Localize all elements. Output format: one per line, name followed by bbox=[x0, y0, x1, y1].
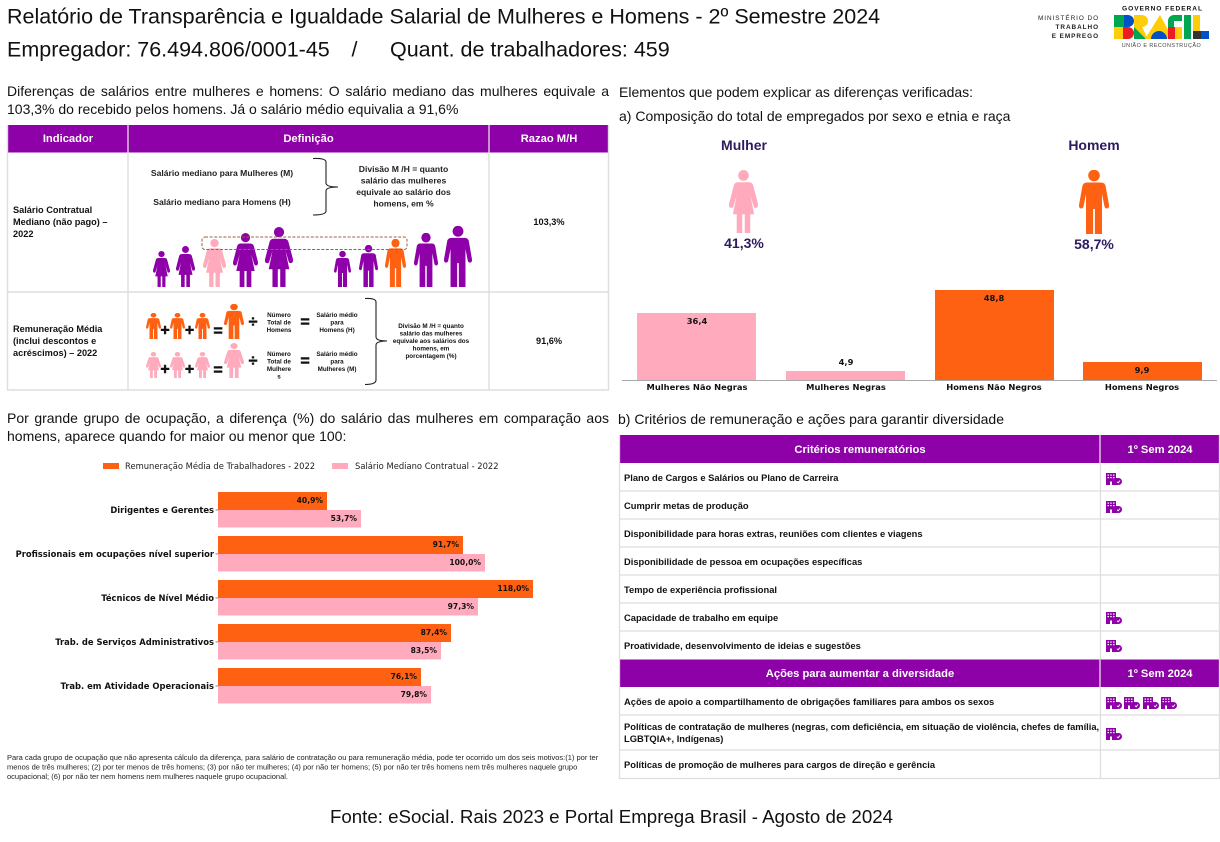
panel: homem: Homem bbox=[1068, 137, 1120, 153]
panel: mulher: 41,3% bbox=[724, 235, 764, 251]
text block: occupation difference: Por grande grupo de ocupação, a diferença (%) do salário das mulheres em comparação aos bbox=[7, 410, 609, 426]
bar chart: ocupação: Trab. de Serviços Administrativos bbox=[55, 637, 214, 647]
title: Relatório de Transparência e Igualdade Salarial de Mulheres e Homens - 2º Semestre 2024 bbox=[7, 4, 880, 28]
formula: homens: = bbox=[300, 314, 310, 331]
formula: homens: + bbox=[185, 322, 194, 339]
bar chart: ocupação: 100,0% bbox=[449, 558, 481, 567]
formula: mulheres: Mulhere bbox=[267, 366, 292, 373]
heading: elementos: Elementos que podem explicar as diferenças verificadas: bbox=[619, 84, 973, 100]
formula: mulheres: ÷ bbox=[249, 353, 258, 370]
bar chart: composição: Mulheres Não Negras bbox=[647, 382, 747, 392]
row: salário mediano: Salário mediano para Homens (H) bbox=[153, 197, 291, 207]
logo: governo federal brasil: GOVERNO FEDERAL bbox=[1122, 6, 1203, 12]
criteria rows: Capacidade de trabalho em equipe bbox=[624, 613, 778, 623]
criteria rows: Cumprir metas de produção bbox=[624, 501, 749, 511]
bar chart: ocupação: Dirigentes e Gerentes bbox=[110, 505, 214, 515]
criteria rows: Políticas de promoção de mulheres para cargos de direção e gerência bbox=[624, 760, 936, 770]
row: remuneração média: porcentagem (%) bbox=[405, 353, 457, 360]
row: remuneração média: homens, em bbox=[413, 346, 450, 352]
bar chart: composição: Mulheres Negras bbox=[806, 382, 886, 392]
legend: Remuneração Média de Trabalhadores - 2022 bbox=[125, 461, 315, 471]
title: Quant. de trabalhadores: 459 bbox=[390, 38, 670, 62]
row: remuneração média bbox=[13, 298, 562, 384]
formula: mulheres: Mulheres (M) bbox=[318, 366, 356, 373]
row: salário mediano: 2022 bbox=[13, 229, 33, 239]
row: salário mediano: equivale ao salário dos bbox=[356, 187, 451, 197]
title: Empregador: 76.494.806/0001-45 bbox=[7, 38, 330, 62]
heading: critérios: b) Critérios de remuneração e ações para garantir diversidade bbox=[618, 411, 1004, 427]
heading: composição: a) Composição do total de empregados por sexo e etnia e raça bbox=[619, 108, 1011, 124]
logo: ministério bbox=[1038, 13, 1099, 40]
logo: ministério: TRABALHO bbox=[1056, 24, 1099, 31]
formula: homens: para bbox=[330, 320, 344, 326]
source line: Fonte: eSocial. Rais 2023 e Portal Emprega Brasil - Agosto de 2024 bbox=[330, 806, 893, 827]
criteria header bbox=[619, 435, 1220, 463]
footnote bbox=[7, 753, 599, 781]
bar chart: composição: 48,8 bbox=[984, 293, 1004, 303]
criteria rows: Disponibilidade para horas extras, reuniões com clientes e viagens bbox=[624, 529, 923, 539]
formula: mulheres: = bbox=[300, 353, 310, 370]
legend: Salário Mediano Contratual - 2022 bbox=[355, 461, 499, 471]
row: salário mediano bbox=[13, 158, 565, 287]
bar chart: ocupação: 91,7% bbox=[433, 540, 459, 549]
row: salário mediano: salário das mulheres bbox=[361, 176, 446, 186]
icons: check marks bbox=[1106, 473, 1177, 740]
formula: mulheres: + bbox=[185, 361, 194, 378]
formula: homens: Salário médio bbox=[316, 312, 358, 319]
table header: Indicador bbox=[43, 133, 94, 145]
panel: criteria table bbox=[619, 435, 1220, 778]
row: remuneração média: Divisão M /H = quanto bbox=[398, 323, 464, 330]
bar chart: ocupação: 87,4% bbox=[421, 628, 447, 637]
row: salário mediano: Divisão M /H = quanto bbox=[359, 164, 448, 174]
legend bbox=[103, 461, 499, 471]
table header: Definição bbox=[283, 133, 334, 145]
text block: salary difference: Diferenças de salários entre mulheres e homens: O salário mediano das mulheres equivale a bbox=[7, 83, 609, 99]
table header: Razao M/H bbox=[521, 133, 577, 145]
pictogram: people row bbox=[153, 226, 472, 287]
bar chart: composição: 4,9 bbox=[839, 357, 854, 367]
row: salário mediano: Salário mediano para Mulheres (M) bbox=[151, 168, 293, 178]
criteria rows: LGBTQIA+, Indígenas) bbox=[624, 734, 723, 744]
footnote: Para cada grupo de ocupação que não apresenta cálculo da diferença, para salário de contratação ou para remuneração média, pode ter ocorrido um dos seis motivos:(1) por ter bbox=[7, 753, 599, 762]
panel: mulher bbox=[721, 137, 767, 251]
row: remuneração média: acréscimos) – 2022 bbox=[13, 348, 97, 358]
formula: mulheres: Total de bbox=[267, 358, 291, 366]
row: remuneração média: equivale aos salários dos bbox=[393, 338, 470, 345]
logo: ministério: MINISTÉRIO DO bbox=[1038, 13, 1099, 22]
row: remuneração média: Remuneração Média bbox=[13, 324, 103, 334]
bar chart: ocupação: 83,5% bbox=[411, 646, 437, 655]
bar chart: ocupação: Profissionais em ocupações nível superior bbox=[16, 549, 215, 559]
bar chart: ocupação: 79,8% bbox=[401, 690, 427, 699]
bar chart: composição bbox=[622, 290, 1217, 392]
actions header: 1º Sem 2024 bbox=[1127, 668, 1193, 680]
criteria rows: Ações de apoio a compartilhamento de obrigações familiares para ambos os sexos bbox=[624, 697, 994, 707]
logo: governo federal brasil: UNIÃO E RECONSTRUÇÃO bbox=[1122, 42, 1201, 49]
panel: indicator table bbox=[7, 125, 609, 390]
formula: mulheres: para bbox=[330, 358, 344, 366]
criteria header: Critérios remuneratórios bbox=[794, 444, 926, 456]
logo: ministério: E EMPREGO bbox=[1052, 33, 1099, 40]
criteria rows: Proatividade, desenvolvimento de ideias e sugestões bbox=[624, 641, 861, 651]
bar chart: ocupação: 118,0% bbox=[497, 584, 529, 593]
bar chart: ocupação: 40,9% bbox=[297, 496, 323, 505]
actions header bbox=[619, 659, 1220, 687]
row: salário mediano: Salário Contratual bbox=[13, 205, 92, 215]
formula: mulheres: Salário médio bbox=[316, 351, 358, 358]
bar chart: ocupação: 53,7% bbox=[331, 514, 357, 523]
bar chart: ocupação: 76,1% bbox=[391, 672, 417, 681]
bar chart: composição: 9,9 bbox=[1135, 365, 1150, 375]
criteria rows bbox=[624, 473, 1099, 770]
text block: salary difference bbox=[7, 83, 610, 117]
formula: mulheres: = bbox=[213, 362, 223, 379]
formula: homens: Homens bbox=[267, 327, 292, 334]
formula: mulheres bbox=[146, 343, 358, 380]
table header bbox=[7, 125, 609, 152]
row: salário mediano: Mediano (não pago) – bbox=[13, 217, 107, 227]
criteria rows: Disponibilidade de pessoa em ocupações específicas bbox=[624, 557, 862, 567]
bar chart: composição: Homens Negros bbox=[1105, 382, 1179, 392]
title: / bbox=[352, 38, 358, 62]
formula: homens: ÷ bbox=[249, 314, 258, 331]
logo: governo federal brasil bbox=[1114, 6, 1209, 49]
formula: homens: Número bbox=[267, 312, 291, 319]
text block: occupation difference bbox=[7, 410, 609, 444]
bar chart: composição: 36,4 bbox=[687, 316, 707, 326]
title bbox=[7, 4, 880, 62]
bar chart: ocupação: Trab. em Atividade Operacionais bbox=[60, 681, 214, 691]
bar chart: ocupação: 97,3% bbox=[448, 602, 474, 611]
formula: homens: Total de bbox=[267, 320, 291, 326]
formula: homens bbox=[146, 304, 358, 340]
criteria header: 1º Sem 2024 bbox=[1127, 444, 1193, 456]
panel: homem bbox=[1068, 137, 1120, 252]
formula: homens: = bbox=[213, 323, 223, 340]
row: remuneração média: (inclui descontos e bbox=[13, 336, 96, 346]
formula: mulheres: Número bbox=[267, 351, 291, 358]
text block: occupation difference: homens, aparece quando for maior ou menor que 100: bbox=[7, 428, 346, 444]
bar chart: composição: Homens Não Negros bbox=[946, 382, 1042, 392]
row: remuneração média: salário das mulheres bbox=[400, 330, 463, 338]
criteria rows: Tempo de experiência profissional bbox=[624, 585, 777, 595]
criteria rows: Plano de Cargos e Salários ou Plano de Carreira bbox=[624, 473, 839, 483]
bar chart: ocupação: Técnicos de Nível Médio bbox=[101, 593, 214, 603]
formula: mulheres: s bbox=[277, 374, 281, 380]
footnote: menos de três mulheres; (2) por ter menos de três homens; (3) por não ter mulheres; (4) por não ter homens; (5) por não ter três homens nem três mulheres naquele grupo bbox=[7, 762, 577, 772]
panel: homem: 58,7% bbox=[1074, 236, 1114, 252]
row: salário mediano: homens, em % bbox=[373, 198, 434, 208]
formula: mulheres: + bbox=[160, 361, 170, 378]
row: remuneração média: 91,6% bbox=[536, 336, 562, 346]
footnote: ocupacional; (6) por não ter nem homens nem mulheres naquele grupo ocupacional. bbox=[7, 772, 288, 781]
panel: mulher: Mulher bbox=[721, 137, 767, 153]
formula: homens: Homens (H) bbox=[319, 327, 355, 334]
formula: homens: + bbox=[160, 322, 170, 339]
text block: salary difference: 103,3% do recebido pelos homens. Já o salário médio equivalia a 91,6% bbox=[7, 100, 458, 116]
actions header: Ações para aumentar a diversidade bbox=[766, 668, 954, 680]
bar chart: ocupação bbox=[16, 492, 533, 704]
criteria rows: Políticas de contratação de mulheres (negras, com deficiência, em situação de violência, chefes de família, bbox=[624, 722, 1099, 732]
row: salário mediano: 103,3% bbox=[533, 217, 565, 227]
